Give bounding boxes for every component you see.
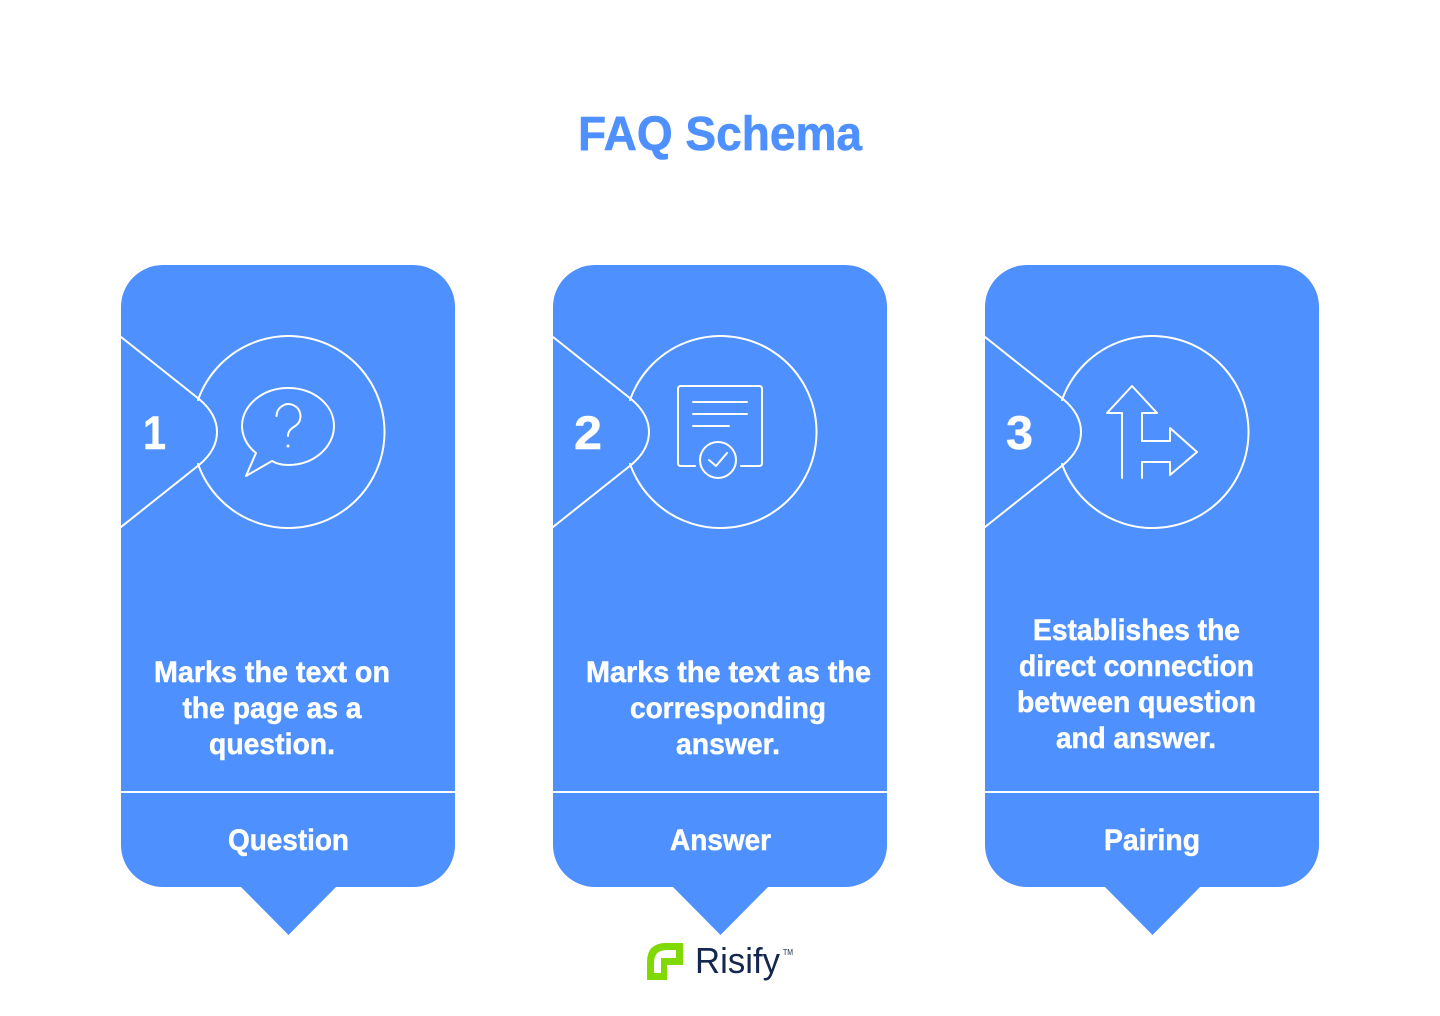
panel: question — [121, 265, 455, 935]
step number: 3 — [1006, 406, 1033, 459]
description text — [586, 656, 871, 761]
label: Question — [228, 824, 349, 857]
description text: Marks the text as the — [586, 656, 871, 689]
description text: answer. — [676, 728, 780, 761]
divider — [985, 791, 1319, 793]
description text: Establishes the — [1033, 614, 1240, 647]
label: Answer — [670, 824, 771, 857]
icon: certified document — [678, 386, 762, 478]
card background with pointer — [985, 265, 1319, 935]
number badge outline — [553, 337, 649, 527]
description text: direct connection — [1019, 650, 1254, 683]
label: Pairing — [1104, 824, 1200, 857]
panel: pairing — [985, 265, 1319, 935]
trademark: TM — [783, 948, 793, 957]
card background with pointer — [553, 265, 887, 935]
title: FAQ Schema — [578, 108, 862, 161]
description text — [1017, 614, 1256, 755]
icon ring — [1062, 336, 1249, 528]
description text: between question — [1017, 686, 1256, 719]
step number: 1 — [143, 406, 166, 459]
number badge outline — [121, 337, 217, 527]
description text: Marks the text on — [154, 656, 390, 689]
description text: question. — [209, 728, 335, 761]
divider — [121, 791, 455, 793]
number badge outline — [985, 337, 1081, 527]
icon ring — [198, 336, 385, 528]
logo wordmark: Risify — [695, 940, 780, 981]
icon: branching arrows — [1107, 386, 1197, 478]
icon: question speech bubble — [242, 388, 334, 476]
description text: and answer. — [1056, 722, 1216, 755]
step number: 2 — [574, 406, 602, 459]
logo: Risify — [647, 940, 793, 981]
description text: the page as a — [182, 692, 362, 725]
icon ring — [630, 336, 817, 528]
logo mark — [647, 943, 683, 980]
panel: answer — [553, 265, 887, 935]
description text: corresponding — [630, 692, 826, 725]
card background with pointer — [121, 265, 455, 935]
divider — [553, 791, 887, 793]
description text — [154, 656, 390, 761]
